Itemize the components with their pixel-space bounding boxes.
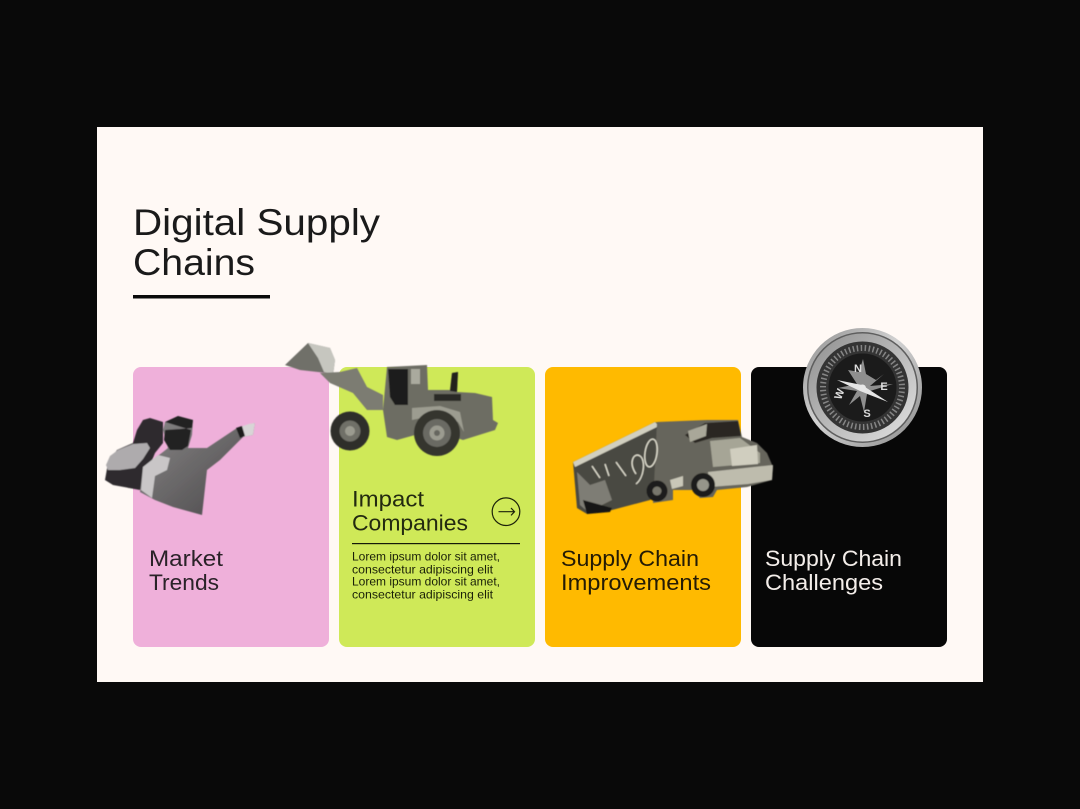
slide background panel [97,127,983,682]
heading: supply chain challenges: Supply Chain [765,546,902,571]
body text: consectetur adipiscing elit [352,588,494,602]
panel: supply chain challenges [751,367,947,647]
heading: supply chain improvements [561,546,711,595]
body text: Lorem ipsum dolor sit amet, [352,574,500,588]
panel: impact companies [339,367,535,647]
heading: supply chain challenges: Challenges [765,570,883,595]
heading: market trends: Market [149,546,223,571]
body text: consectetur adipiscing elit [352,562,494,576]
compass letters: S [863,408,871,420]
compass letters: N [854,363,862,375]
heading: market trends: Trends [149,570,219,595]
title [133,202,381,283]
heading: supply chain challenges [765,546,902,595]
icon: arrow in circle [492,498,520,526]
compass letters [833,363,888,420]
heading: supply chain improvements: Supply Chain [561,546,699,571]
panel: supply chain improvements [545,367,741,647]
body text: Lorem ipsum dolor sit amet, [352,550,500,564]
heading: market trends [149,546,223,595]
panel: market trends [133,367,329,647]
image: wheel loader [285,343,498,456]
compass needle [837,359,893,412]
title: Digital Supply [133,202,381,243]
title: Chains [133,242,255,283]
body text [352,550,500,602]
image: semi truck [573,420,773,514]
heading: supply chain improvements: Improvements [561,570,711,595]
image: compass [803,328,922,447]
image: two people pointing [105,416,255,515]
compass letters: W [833,387,848,401]
compass letters: E [880,381,888,393]
title underline [133,295,270,298]
heading: impact companies: Impact [352,486,424,512]
heading: impact companies: Companies [352,510,468,536]
heading: impact companies [352,486,468,536]
divider [352,543,520,544]
